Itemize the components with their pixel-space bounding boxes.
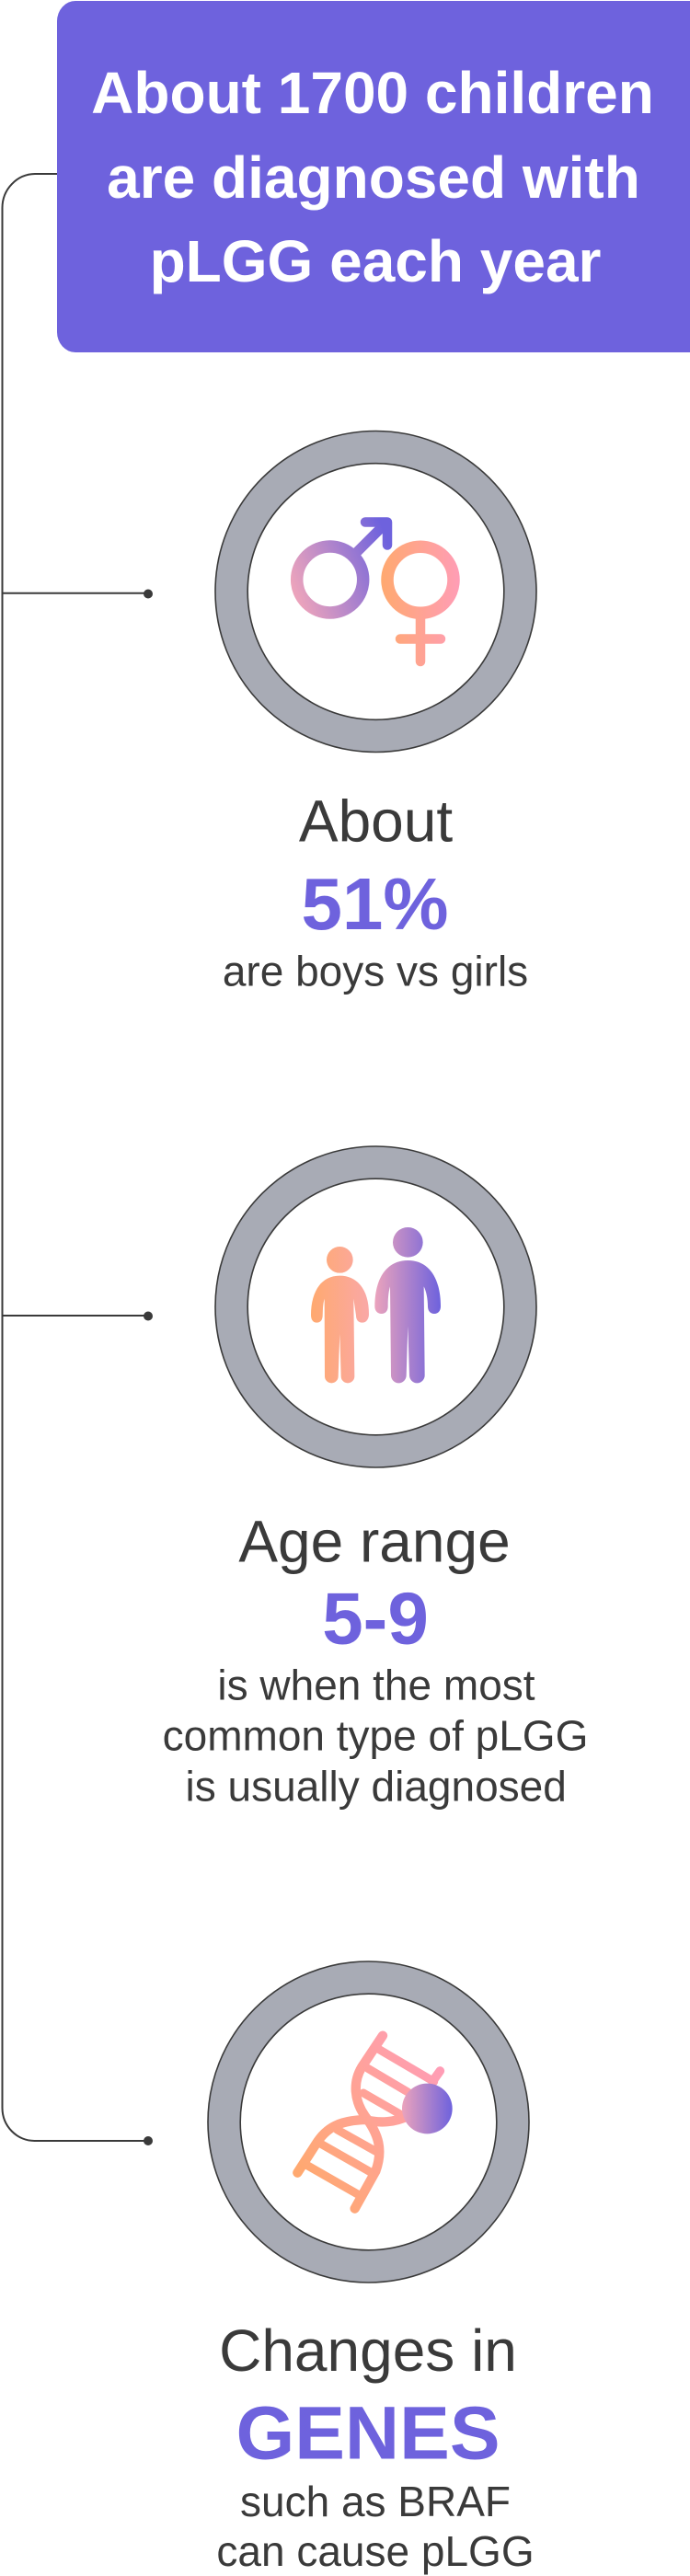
stat 2 text: Age range — [238, 1509, 511, 1575]
stat 2 text: is usually diagnosed — [186, 1762, 567, 1810]
ring — [215, 431, 536, 753]
stat 2 text — [163, 1509, 588, 1810]
stat 2 text: 5-9 — [322, 1578, 429, 1660]
stat 3: genes — [208, 1961, 535, 2575]
timeline connector — [2, 174, 153, 2145]
icon: DNA helix with highlighted gene — [297, 2036, 453, 2209]
stat 3 text — [216, 2317, 535, 2575]
stat 3 text: Changes in — [219, 2317, 517, 2384]
ring — [208, 1961, 529, 2283]
header text: are diagnosed with — [107, 144, 640, 211]
icon: male and female symbols — [297, 523, 454, 661]
stat 3 text: can cause pLGG — [216, 2527, 535, 2575]
stat 2: age range — [163, 1146, 588, 1810]
icon: two children — [311, 1227, 441, 1383]
stat 1: boys vs girls — [215, 431, 536, 995]
header text — [91, 60, 654, 294]
ring — [215, 1146, 536, 1467]
stat 1 text — [223, 788, 528, 995]
stat 3 text: such as BRAF — [240, 2478, 511, 2525]
stat 2 text: common type of pLGG — [163, 1711, 588, 1759]
stat 1 text: About — [299, 788, 453, 855]
header text: pLGG each year — [150, 228, 601, 294]
header panel — [57, 1, 690, 352]
stat 1 text: are boys vs girls — [223, 948, 528, 995]
stat 1 text: 51% — [301, 863, 449, 945]
stat 2 text: is when the most — [217, 1661, 535, 1708]
stat 3 text: GENES — [236, 2392, 500, 2476]
header text: About 1700 children — [91, 60, 654, 126]
